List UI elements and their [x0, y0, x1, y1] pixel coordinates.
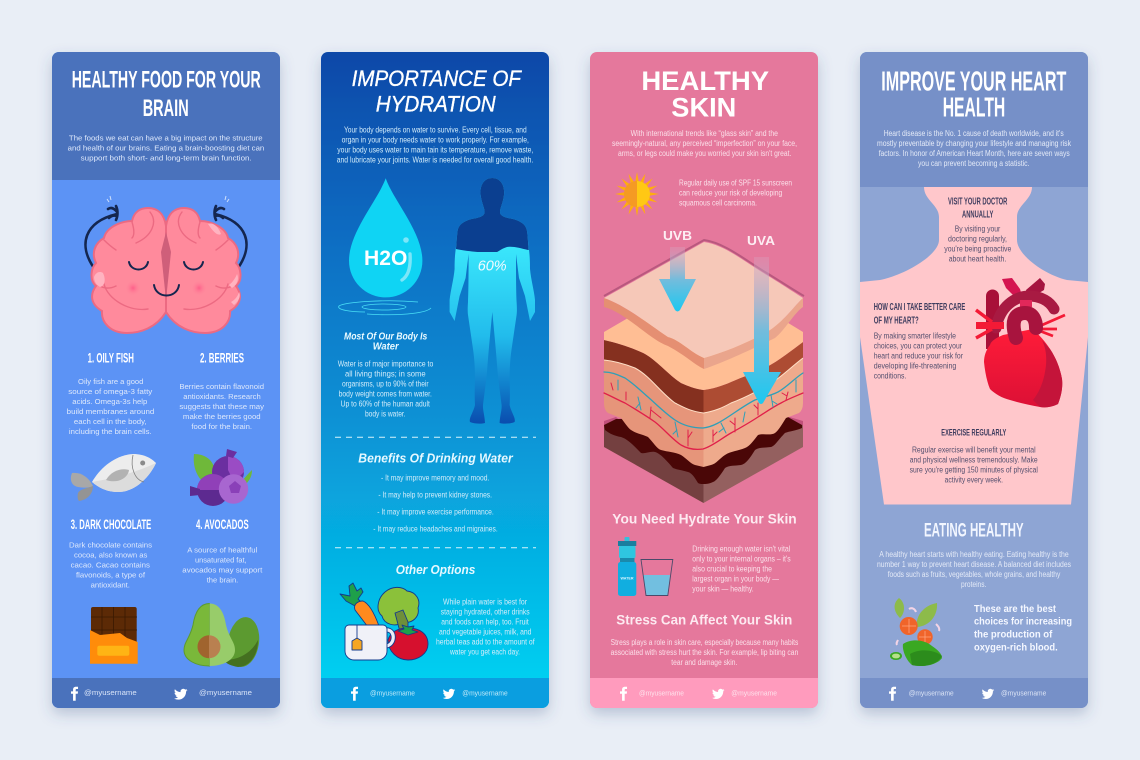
- text: most of our body is water: Up to 60% of the human adult: [341, 399, 431, 408]
- item: oily fish: [67, 350, 154, 436]
- text: other options: herbal teas add to the amount of: [436, 637, 535, 646]
- heading: other options: Other Options: [396, 562, 475, 577]
- icon: glass of water: [641, 560, 673, 596]
- text: most of our body is water: [338, 330, 434, 418]
- icon: facebook: [351, 687, 358, 701]
- footer bar: [590, 678, 818, 708]
- skin layer diagram: [604, 229, 804, 503]
- text: benefits of drinking water: - It may reduce headaches and migraines.: [373, 525, 498, 534]
- text: most of our body is water: Water is of major importance to: [338, 360, 434, 369]
- text: visit your doctor: doctoring regularly,: [948, 235, 1007, 244]
- item: avocados: A source of healthful: [187, 546, 258, 555]
- footer bar: [321, 678, 549, 708]
- panel: healthy food for your brain: [52, 52, 280, 708]
- text: benefits of drinking water: Benefits Of Drinking Water: [358, 450, 514, 465]
- text: visit your doctor: ANNUALLY: [962, 210, 994, 221]
- item: oily fish: source of omega-3 fatty: [68, 387, 152, 396]
- intro text: organ in your body needs water to work properly. For example,: [342, 136, 529, 145]
- twitter handle: @myusername: [1001, 688, 1046, 697]
- arrow: UVB: UVB: [663, 229, 692, 243]
- panel: improve your heart health: [860, 52, 1088, 708]
- item: berries: antioxidants. Research: [183, 392, 261, 401]
- text: other options: staying hydrated, other drinks: [441, 607, 530, 616]
- item: oily fish: 1. OILY FISH: [88, 350, 134, 366]
- icon: facebook: [71, 687, 78, 701]
- icon: facebook: [620, 687, 627, 701]
- icon: facebook: [889, 687, 896, 701]
- item: dark chocolate: antioxidant.: [91, 581, 130, 590]
- text: how can I take better care: [874, 302, 965, 380]
- item: oily fish: including the brain cells.: [69, 427, 152, 436]
- text: exercise regularly: activity every week.: [945, 476, 1003, 485]
- text: visit your doctor: about heart health.: [949, 255, 1006, 264]
- intro text: [877, 129, 1072, 168]
- icon: blueberries: [190, 449, 252, 506]
- text: how can I take better care: conditions.: [874, 371, 906, 380]
- 60% label: 60%: [478, 259, 507, 275]
- text: most of our body is water: Water: [373, 340, 400, 352]
- callout: oxygen-rich blood: [974, 603, 1072, 653]
- item: berries: food for the brain.: [191, 422, 252, 431]
- item: avocados: [182, 516, 263, 585]
- text: eating healthy: proteins.: [961, 580, 986, 589]
- item: dark chocolate: 3. DARK CHOCOLATE: [71, 516, 151, 532]
- text: how can I take better care: heart and reduce your risk for: [874, 351, 963, 360]
- item: avocados: the brain.: [207, 576, 238, 585]
- title: [72, 66, 261, 122]
- intro text: Your body depends on water to survive. Every cell, tissue, and: [344, 126, 527, 135]
- intro text: factors. In honor of American Heart Month, here are seven ways: [879, 149, 1070, 158]
- panel: healthy skin: [590, 52, 818, 708]
- intro text: and health of our brains. Eating a brain-boosting diet can: [68, 144, 264, 153]
- callout: oxygen-rich blood: choices for increasing: [974, 616, 1072, 628]
- icon: twitter: [174, 689, 187, 700]
- twitter handle: @myusername: [462, 689, 508, 698]
- item: oily fish: Oily fish are a good: [78, 377, 143, 386]
- text: exercise regularly: [910, 428, 1038, 485]
- text: other options: While plain water is best for: [443, 597, 527, 606]
- text: stress: Stress plays a role in skin care, especially because many habits: [611, 638, 798, 647]
- icon: water drop: [339, 178, 431, 315]
- text: exercise regularly: EXERCISE REGULARLY: [941, 428, 1007, 439]
- facebook handle: @myusername: [370, 689, 415, 698]
- item: oily fish: acids. Omega-3s help: [72, 397, 147, 406]
- text: hydrate: also crucial to keeping the: [692, 565, 772, 574]
- facebook handle: @myusername: [909, 688, 954, 697]
- text: most of our body is water: organisms, up to 90% of their: [342, 379, 429, 388]
- text: stress: [611, 638, 798, 667]
- item: dark chocolate: cacao. Cacao contains: [71, 561, 150, 570]
- icon: smiling brain: [85, 196, 247, 333]
- text: sunscreen: [679, 179, 792, 208]
- item: oily fish: each cell in the body,: [74, 417, 147, 426]
- intro text: [337, 126, 533, 165]
- text: visit your doctor: VISIT YOUR DOCTOR: [948, 197, 1008, 208]
- title: BRAIN: [143, 95, 189, 122]
- title: HYDRATION: [376, 92, 496, 117]
- facebook handle: @myusername: [639, 689, 684, 698]
- intro text: arms, or legs could make you worried your skin isn't great.: [618, 149, 791, 158]
- text: other options: [436, 597, 535, 656]
- text: eating healthy: A healthy heart starts with healthy eating. Eating healthy is the: [879, 550, 1069, 559]
- item: berries: suggests that these may: [179, 402, 264, 411]
- item: avocados: unsaturated fat,: [195, 556, 247, 565]
- title: HEALTH: [943, 92, 1005, 123]
- text: exercise regularly: Regular exercise will benefit your mental: [912, 446, 1036, 455]
- item: dark chocolate: [69, 516, 152, 590]
- title: [881, 66, 1066, 123]
- icon: vegetables and tea mug: [340, 583, 428, 660]
- text: hydrate: Drinking enough water isn't vital: [692, 545, 790, 554]
- footer bar: [52, 678, 280, 708]
- text: sunscreen: squamous cell carcinoma.: [679, 199, 757, 208]
- ripples: [339, 301, 431, 315]
- text: stress: tear and damage skin.: [671, 658, 737, 667]
- item: dark chocolate: Dark chocolate contains: [69, 541, 152, 550]
- arrow: UVA: UVA: [747, 234, 775, 248]
- icon: salad vegetables: [890, 598, 942, 666]
- text: stress: associated with stress hurt the skin. For example, lip biting can: [611, 648, 798, 657]
- text: how can I take better care: OF MY HEART?: [874, 315, 919, 326]
- text: other options: and vegetable juices, milk, and: [439, 627, 531, 636]
- callout: oxygen-rich blood: These are the best: [974, 603, 1056, 615]
- text: benefits of drinking water: - It may improve memory and mood.: [381, 474, 489, 483]
- text: most of our body is water: body is water.: [365, 409, 406, 418]
- body silhouette: [860, 187, 1088, 504]
- item: berries: Berries contain flavonoid: [179, 382, 264, 391]
- text: visit your doctor: By visiting your: [955, 225, 1001, 234]
- icon: twitter: [443, 689, 455, 699]
- text: how can I take better care: HOW CAN I TAKE BETTER CARE: [874, 302, 965, 313]
- intro text: The foods we eat can have a big impact on the structure: [69, 134, 263, 143]
- text: other options: and foods can help, too. Fruit: [441, 617, 529, 626]
- intro text: seemingly-natural, any perceived “imperfection” on your face,: [612, 139, 797, 148]
- text: eating healthy: [877, 520, 1071, 589]
- icon: fish: [71, 454, 156, 501]
- intro text: With international trends like “glass skin” and the: [631, 129, 778, 138]
- twitter handle: @myusername: [199, 688, 252, 697]
- title: HEALTHY: [641, 66, 769, 96]
- text: how can I take better care: By making smarter lifestyle: [874, 331, 956, 340]
- blood vessels: [604, 372, 803, 449]
- icon: water bottle: [618, 537, 636, 596]
- H2O label: H2O: [364, 247, 407, 270]
- text: hydrate: your skin — healthy.: [692, 585, 754, 594]
- title: [641, 66, 769, 123]
- text: benefits of drinking water: - It may help to prevent kidney stones.: [378, 491, 492, 500]
- intro text: Heart disease is the No. 1 cause of death worldwide, and it's: [884, 129, 1064, 138]
- text: how can I take better care: choices, you can protect your: [874, 341, 962, 350]
- figure: human body 60 percent water: [450, 178, 535, 424]
- arrow: UVA: [743, 234, 781, 404]
- heading: you need hydrate your skin: You Need Hydrate Your Skin: [612, 511, 797, 526]
- text: most of our body is water: body weight comes from water.: [339, 389, 432, 398]
- item: oily fish: build membranes around: [67, 407, 154, 416]
- icon: avocado: [184, 604, 262, 669]
- text: hydrate: largest organ in your body —: [692, 575, 779, 584]
- heading: stress can affect your skin: Stress Can Affect Your Skin: [616, 612, 792, 627]
- intro text: your body uses water to main tain its temperature, remove waste,: [337, 146, 533, 155]
- text: most of our body is water: all living things; in some: [345, 370, 426, 379]
- item: berries: make the berries good: [183, 412, 261, 421]
- text: how can I take better care: developing life-threatening: [874, 361, 956, 370]
- icon: heart: [976, 278, 1065, 407]
- item: avocados: 4. AVOCADOS: [196, 516, 249, 532]
- text: visit your doctor: you're being proactive: [944, 245, 1012, 254]
- twitter handle: @myusername: [731, 689, 777, 698]
- intro text: you can prevent becoming a statistic.: [918, 159, 1029, 168]
- title: SKIN: [671, 93, 736, 123]
- text: exercise regularly: sure you're getting 150 minutes of physical: [910, 466, 1038, 475]
- item: dark chocolate: flavonoids, a type of: [76, 571, 146, 580]
- text: sunscreen: Regular daily use of SPF 15 sunscreen: [679, 179, 792, 188]
- text: visit your doctor: [944, 197, 1012, 264]
- intro text: [68, 134, 264, 163]
- title: IMPORTANCE OF: [352, 66, 522, 91]
- arrow: UVB: [659, 229, 696, 312]
- footer bar: [860, 678, 1088, 708]
- text: benefits of drinking water: - It may improve exercise performance.: [377, 508, 494, 517]
- intro text: [612, 129, 797, 158]
- panel: importance of hydration: [321, 52, 549, 708]
- item: avocados: avocados may support: [182, 566, 263, 575]
- item: dark chocolate: cocoa, also known as: [74, 551, 147, 560]
- item: berries: 2. BERRIES: [200, 350, 244, 366]
- text: exercise regularly: and physical wellness tremendously. Make: [910, 456, 1038, 465]
- callout: oxygen-rich blood: the production of: [974, 629, 1053, 641]
- icon: twitter: [712, 689, 724, 699]
- title: [352, 66, 522, 117]
- icon: water bottle: WATER: [620, 576, 634, 580]
- text: eating healthy: number 1 way to prevent heart disease. A balanced diet includes: [877, 560, 1071, 569]
- intro text: and lubricate your joints. Water is needed for overall good health.: [337, 156, 533, 165]
- intro text: mostly preventable by changing your lifestyle and managing risk: [877, 139, 1072, 148]
- text: hydrate: [692, 545, 791, 594]
- icon: twitter: [982, 689, 994, 699]
- icon: chocolate bar: [90, 607, 138, 664]
- text: eating healthy: EATING HEALTHY: [924, 520, 1024, 542]
- text: hydrate: only to your internal organs – it's: [692, 555, 791, 564]
- intro text: support both short- and long-term brain function.: [81, 154, 252, 163]
- text: sunscreen: can reduce your risk of developing: [679, 189, 782, 198]
- callout: oxygen-rich blood: oxygen-rich blood.: [974, 641, 1058, 653]
- facebook handle: @myusername: [84, 688, 137, 697]
- text: benefits of drinking water: [358, 450, 514, 534]
- item: berries: [179, 350, 264, 431]
- text: most of our body is water: Most Of Our Body Is: [344, 330, 427, 342]
- icon: sun: [615, 172, 659, 216]
- text: other options: water you get each day.: [449, 647, 520, 656]
- text: eating healthy: foods such as fruits, vegetables, whole grains, and healthy: [888, 570, 1060, 579]
- title: HEALTHY FOOD FOR YOUR: [72, 66, 261, 94]
